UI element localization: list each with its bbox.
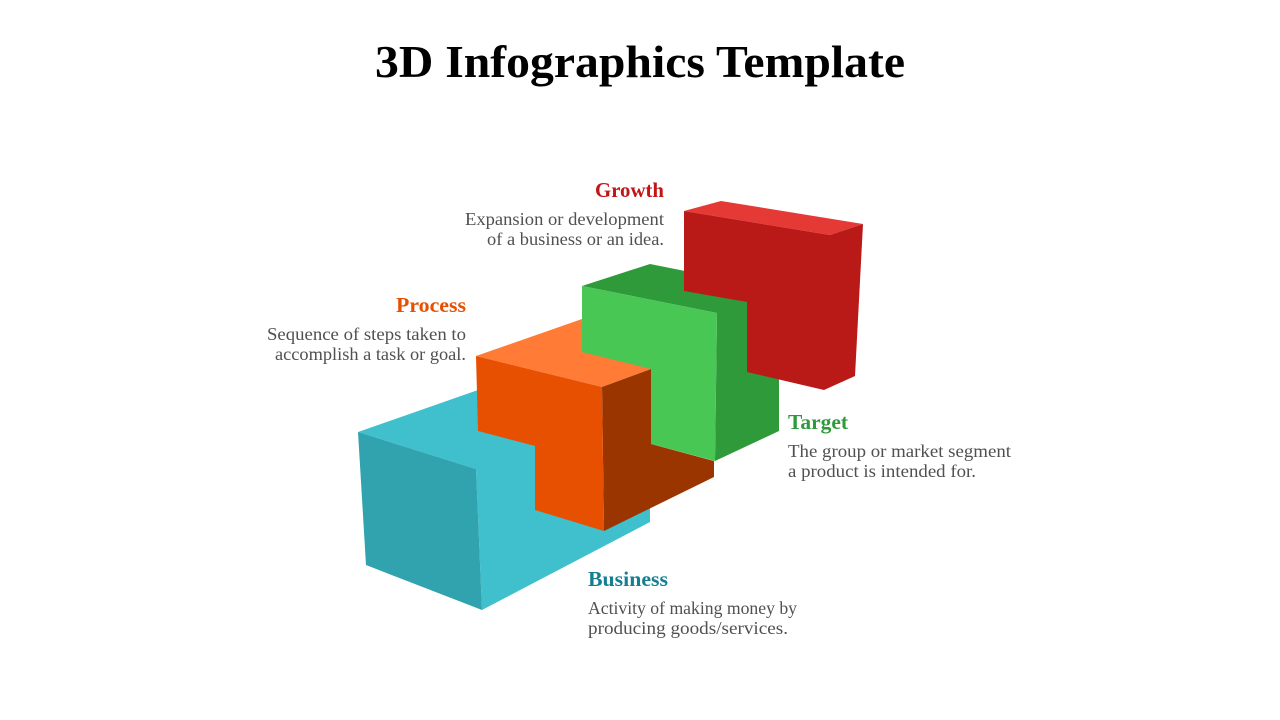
label: business: producing goods/services.: [588, 618, 788, 638]
block: target (green): [582, 264, 779, 461]
label: process: [267, 293, 466, 364]
label: growth: Growth: [595, 178, 664, 202]
3D stepped blocks: [358, 201, 863, 610]
label: growth: Expansion or development: [465, 209, 664, 229]
block: business (teal): [358, 390, 650, 610]
block: growth (red): [684, 201, 863, 390]
block: process top face (orange): [476, 319, 651, 387]
label: growth: of a business or an idea.: [487, 229, 664, 249]
label: business: Business: [588, 567, 668, 591]
label: target: Target: [788, 410, 848, 434]
label: business: [588, 567, 797, 638]
label: process: Sequence of steps taken to: [267, 324, 466, 344]
label: target: [788, 410, 1011, 481]
label: business: Activity of making money by: [588, 598, 797, 618]
label: growth: [465, 178, 664, 249]
title: 3D Infographics Template: [375, 36, 905, 87]
label: target: a product is intended for.: [788, 461, 976, 481]
block: process front and side (orange): [476, 356, 714, 531]
label: process: accomplish a task or goal.: [275, 344, 466, 364]
label: target: The group or market segment: [788, 441, 1011, 461]
label: process: Process: [396, 293, 466, 317]
